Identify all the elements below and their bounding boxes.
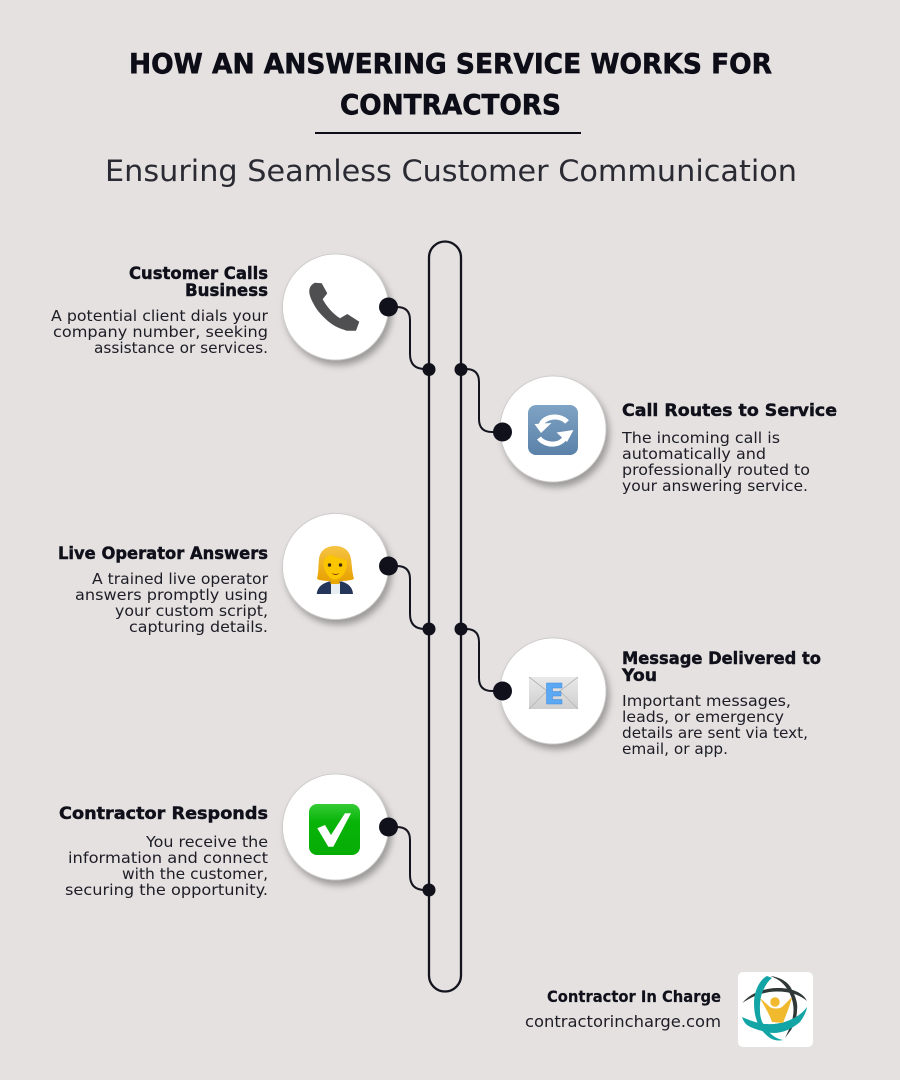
connector 4 <box>454 622 512 700</box>
text: live operator: Live Operator Answers <box>58 544 268 564</box>
footer brand text <box>525 987 721 1031</box>
connector 1 <box>379 298 436 376</box>
icon circle <box>282 514 388 620</box>
title: HOW AN ANSWERING SERVICE WORKS FOR <box>129 47 772 80</box>
connector 3 <box>379 556 436 636</box>
text: live operator: answers promptly using <box>75 586 268 604</box>
text: message delivered: Message Delivered to <box>622 649 821 669</box>
text: customer calls business: Business <box>185 281 268 301</box>
step 5: contractor responds <box>59 774 436 899</box>
icon: e-mail envelope <box>529 677 578 709</box>
text: message delivered: email, or app. <box>622 740 728 758</box>
text: call routes: professionally routed to <box>622 461 810 479</box>
icon: woman office worker <box>317 546 354 594</box>
text: live operator: capturing details. <box>129 618 268 636</box>
footer brand text: Contractor In Charge <box>547 987 721 1006</box>
text: contractor responds: Contractor Responds <box>59 804 268 824</box>
step 3: live operator answers <box>58 514 436 636</box>
text: contractor responds <box>59 804 268 899</box>
text: customer calls business <box>51 264 269 357</box>
step 2: call routes to service <box>454 363 837 495</box>
icon circle <box>500 376 606 482</box>
icon: green check mark <box>309 804 360 855</box>
text: call routes: your answering service. <box>622 477 808 495</box>
icon circle <box>500 638 606 744</box>
text: call routes: The incoming call is <box>621 429 780 447</box>
title: CONTRACTORS <box>340 88 561 121</box>
connector 2 <box>454 363 512 442</box>
text: customer calls business: company number, seeking <box>53 323 268 341</box>
subtitle: Ensuring Seamless Customer Communication <box>105 154 797 188</box>
central timeline track <box>429 242 461 992</box>
text: live operator <box>58 544 269 636</box>
text: contractor responds: securing the opportunity. <box>65 881 268 899</box>
text: customer calls business: A potential client dials your <box>51 307 269 325</box>
text: live operator: your custom script, <box>115 602 268 620</box>
footer brand text: contractorincharge.com <box>525 1012 721 1031</box>
step 1: customer calls business <box>51 254 436 376</box>
text: message delivered: details are sent via text, <box>622 724 808 742</box>
text: customer calls business: Customer Calls <box>129 264 268 284</box>
text: contractor responds: with the customer, <box>122 865 268 883</box>
text: call routes: Call Routes to Service <box>622 401 837 421</box>
icon: telephone receiver <box>309 283 359 331</box>
icon circle <box>282 774 388 880</box>
text: message delivered <box>621 649 821 758</box>
icon circle <box>282 254 388 360</box>
title <box>129 47 772 121</box>
connector 5 <box>379 818 436 896</box>
icon: sync arrows <box>528 405 578 455</box>
text: call routes <box>621 401 837 495</box>
text: contractor responds: information and connect <box>68 849 268 867</box>
text: call routes: automatically and <box>622 445 766 463</box>
text: live operator: A trained live operator <box>92 570 269 588</box>
logo <box>738 972 813 1047</box>
step 4: message delivered <box>454 622 821 758</box>
text: message delivered: leads, or emergency <box>622 708 784 726</box>
text: contractor responds: You receive the <box>145 833 268 851</box>
text: message delivered: You <box>621 666 657 686</box>
text: message delivered: Important messages, <box>622 692 791 710</box>
text: customer calls business: assistance or services. <box>94 339 268 357</box>
